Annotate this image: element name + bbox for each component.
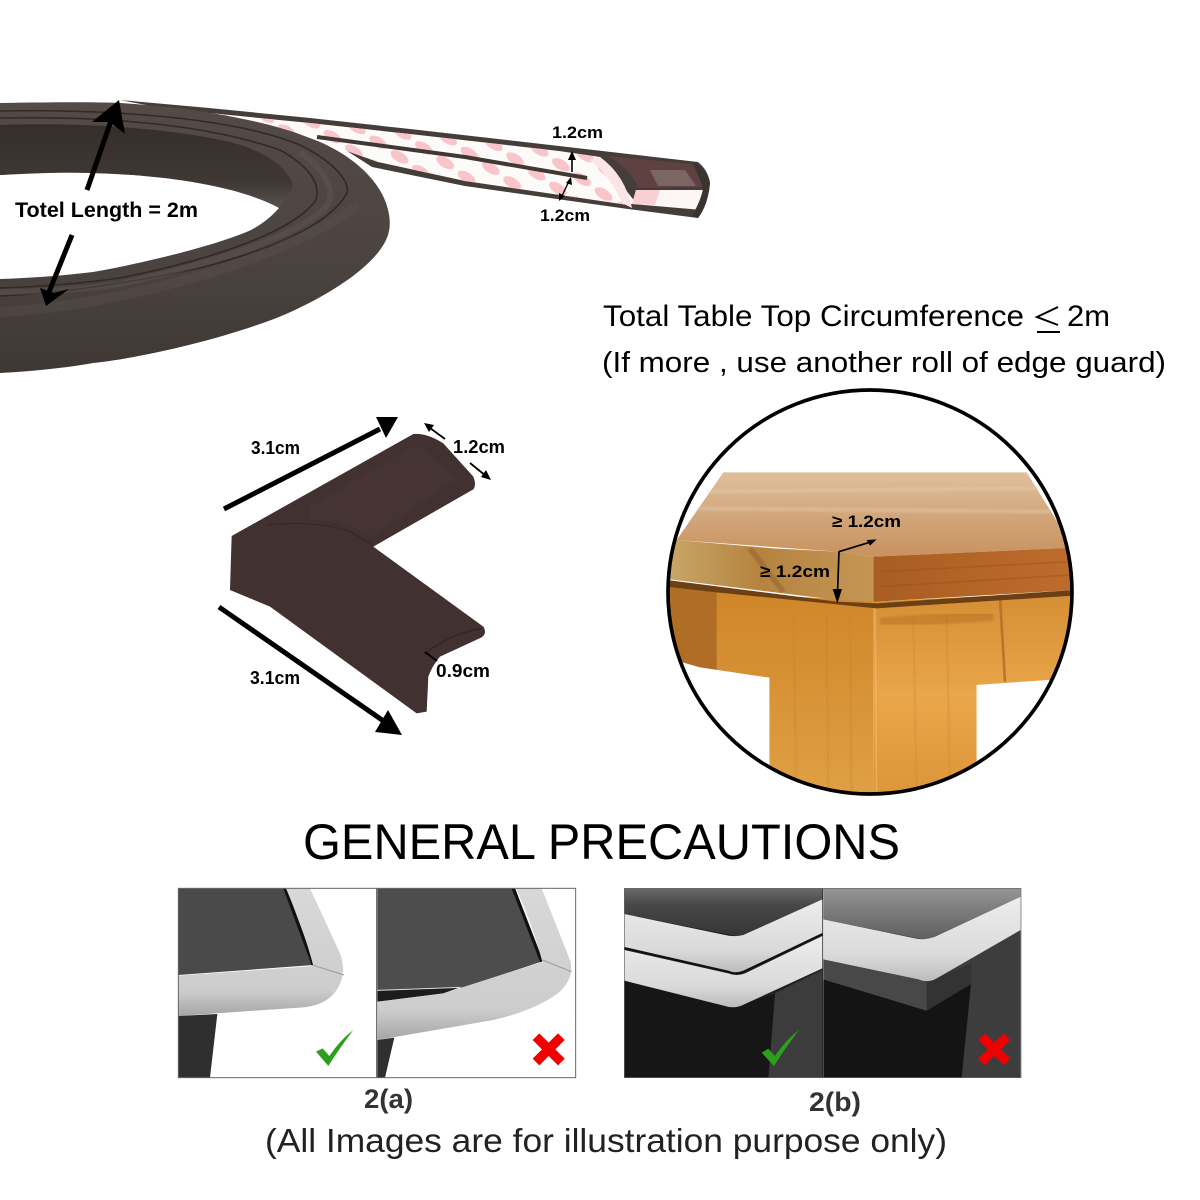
coil ridges — [0, 111, 347, 296]
arrow: table dimension — [833, 539, 877, 603]
label: table edge thickness: ≥ 1.2cm — [760, 562, 830, 581]
label: total length: Totel Length = 2m — [15, 199, 198, 222]
icon: check mark — [762, 1030, 799, 1066]
panel 2(a) — [178, 888, 576, 1078]
note: illustration only: (All Images are for illustration purpose only) — [265, 1122, 947, 1159]
tape cut end — [608, 156, 703, 188]
arrow: tape top width — [568, 151, 576, 172]
icon: check mark — [316, 1030, 353, 1066]
arrow: coil up — [87, 100, 125, 190]
label: tape width top: 1.2cm — [552, 123, 603, 142]
adhesive tape strip — [120, 100, 710, 218]
caption 2(b): 2(b) — [809, 1087, 861, 1117]
arrow: width left — [424, 423, 445, 439]
table leg and apron — [667, 580, 1073, 798]
white background under table — [698, 667, 1050, 765]
coil of edge guard — [0, 100, 710, 373]
label: lower 3.1cm: 3.1cm — [250, 668, 300, 688]
photo: two rows of guard — [624, 888, 823, 1078]
label: 0.9cm: 0.9cm — [436, 661, 490, 681]
icon: red cross — [533, 1033, 565, 1065]
label: 1.2cm: 1.2cm — [453, 437, 505, 457]
coil inner wall — [0, 124, 293, 208]
table circle — [660, 390, 1073, 798]
corner guard diagram — [230, 434, 485, 713]
photo: single guard with gap — [823, 888, 1021, 1078]
table front edge left — [667, 540, 873, 602]
arrow: coil down — [40, 235, 72, 306]
icon: red cross — [978, 1033, 1010, 1065]
photo: incorrect fit — [377, 888, 576, 1078]
corner guard body — [230, 434, 485, 713]
table front edge right — [873, 548, 1073, 602]
coil ring — [0, 102, 390, 373]
photo: correct fit — [178, 888, 377, 1078]
heading: general precautions: GENERAL PRECAUTIONS — [303, 814, 900, 870]
heading: table top circumference: 2m — [1067, 300, 1110, 333]
label: tape width bottom: 1.2cm — [540, 206, 590, 225]
note: use another roll: (If more , use another roll of edge guard) — [602, 347, 1166, 379]
heading: table top circumference: Total Table Top Circumference — [603, 300, 1024, 333]
arrow: upper 3.1cm — [224, 417, 398, 509]
panel 2(b) — [624, 888, 1021, 1078]
label: upper 3.1cm: 3.1cm — [251, 438, 300, 458]
backing liner curl — [590, 157, 632, 208]
middle rib — [317, 137, 587, 178]
arrow: thickness — [425, 652, 437, 661]
caption 2(a): 2(a) — [364, 1084, 413, 1114]
arrow: width right — [470, 463, 491, 480]
table top surface — [677, 472, 1073, 557]
circle outline — [668, 390, 1072, 794]
label: table top depth: ≥ 1.2cm — [832, 512, 901, 531]
arrow: lower 3.1cm — [219, 607, 402, 735]
arrow: tape bottom width — [559, 177, 572, 201]
